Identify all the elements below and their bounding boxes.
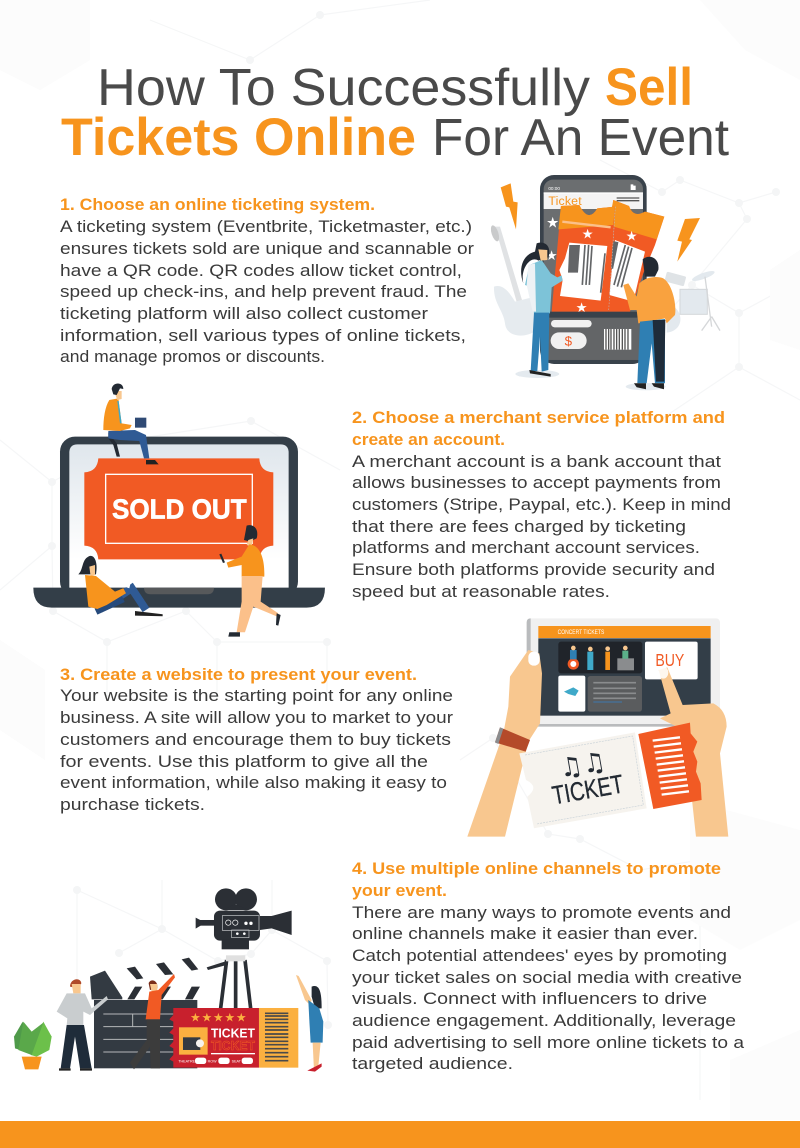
text block: step 3 body: purchase tickets. xyxy=(60,795,205,814)
icon: phone xyxy=(540,175,647,364)
icon: left ticket xyxy=(546,205,615,316)
title: Sell xyxy=(605,58,693,117)
icon: hands xyxy=(467,650,728,837)
icon: phone: 00:00 xyxy=(548,186,560,191)
icon: phone: $ xyxy=(565,333,573,348)
text block: step 3 body xyxy=(60,686,453,814)
illustration: tablet and ticket xyxy=(467,618,728,837)
heading: step 2: create an account. xyxy=(352,430,505,449)
person: woman in blue dress xyxy=(296,975,323,1072)
text block: step 3 body: customers and encourage them to buy tickets xyxy=(60,730,451,749)
ticket: star ticket: SEAT xyxy=(232,1059,242,1063)
text block: step 2 body: that there are fees charged by ticketing xyxy=(352,517,686,536)
icon: lightning bolts xyxy=(501,183,700,262)
icon: tablet: BUY xyxy=(655,650,684,670)
text block: step 4 body: your ticket sales on social media with creative xyxy=(352,968,742,987)
ticket: sold out xyxy=(84,458,273,559)
text block: step 3 body: event information, while also making it easy to xyxy=(60,773,447,792)
text block: step 4 body: audience engagement. Additionally, leverage xyxy=(352,1011,736,1030)
text block: step 1 body: have a QR code. QR codes allow ticket control, xyxy=(60,261,462,280)
icon: clapperboard xyxy=(90,958,200,1068)
ticket: star ticket: TICKET xyxy=(211,1038,255,1053)
panel: step 4 text xyxy=(352,859,745,1073)
text block: step 1 body xyxy=(60,217,474,366)
text block: step 4 body: visuals. Connect with influencers to drive xyxy=(352,989,707,1008)
icon: woman xyxy=(515,243,563,378)
ticket: ♫♫ xyxy=(557,747,608,784)
icon: left ticket: ★ xyxy=(576,301,588,316)
ticket xyxy=(519,723,702,828)
text block: step 4 body xyxy=(352,903,745,1073)
ticket: star ticket: ★★★★★ xyxy=(190,1010,247,1024)
icon: right ticket: ★ xyxy=(626,230,638,245)
text block: step 2 body: customers (Stripe, Paypal, etc.). Keep in mind xyxy=(352,495,731,514)
icon: tablet: CONCERT TICKETS xyxy=(558,630,604,636)
ticket: sold out: SOLD OUT xyxy=(112,494,247,525)
illustration: film production and ticket xyxy=(14,888,323,1072)
icon: man xyxy=(623,257,675,390)
icon: right ticket xyxy=(608,200,664,312)
text block: step 1 body: and manage promos or discounts. xyxy=(60,347,325,366)
icon: potted plant xyxy=(14,1022,52,1069)
heading: step 3: 3. Create a website to present your event. xyxy=(60,665,417,684)
heading: step 1: 1. Choose an online ticketing system. xyxy=(60,195,375,214)
text block: step 1 body: ensures tickets sold are unique and scannable or xyxy=(60,239,474,258)
text block: step 4 body: Catch potential attendees' eyes by promoting xyxy=(352,946,727,965)
person: man pointing xyxy=(57,979,108,1071)
person: man in orange xyxy=(130,974,175,1069)
ticket: star ticket: TICKET xyxy=(211,1026,255,1041)
icon: laptop xyxy=(33,437,325,608)
icon: tablet xyxy=(527,618,720,727)
person: sitting on floor xyxy=(78,556,163,616)
heading: step 4 xyxy=(352,859,721,900)
text block: step 4 body: There are many ways to promote events and xyxy=(352,903,731,922)
text block: step 2 body: speed but at reasonable rates. xyxy=(352,582,610,601)
icon: movie camera on tripod xyxy=(196,888,292,1008)
panel: step 1 text xyxy=(60,195,474,366)
title xyxy=(61,58,730,167)
text block: step 4 body: targeted audience. xyxy=(352,1054,513,1073)
text block: step 2 body xyxy=(352,452,731,601)
heading: step 4: 4. Use multiple online channels to promote xyxy=(352,859,721,878)
illustration: laptop with sold out ticket xyxy=(33,383,325,637)
text block: step 2 body: A merchant account is a bank account that xyxy=(352,452,721,471)
title: For An Event xyxy=(432,109,730,167)
heading: step 2: 2. Choose a merchant service platform and xyxy=(352,408,725,427)
panel: step 2 text xyxy=(352,408,731,601)
ticket: star ticket: THEATRE xyxy=(178,1059,196,1063)
ticket: TICKET xyxy=(550,768,626,810)
panel: step 3 text xyxy=(60,665,453,814)
icon: wristband xyxy=(495,727,530,752)
footer bar xyxy=(0,1121,800,1148)
icon: guitar xyxy=(489,224,537,336)
text block: step 2 body: Ensure both platforms provide security and xyxy=(352,560,715,579)
text block: step 1 body: speed up check-ins, and help prevent fraud. The xyxy=(60,282,467,301)
title: How To Successfully xyxy=(97,59,590,117)
icon: left ticket: ★ xyxy=(582,227,594,242)
person: sitting on laptop xyxy=(103,383,159,464)
image: band on stage xyxy=(558,642,642,673)
icon: phone: Ticket xyxy=(548,194,582,208)
text block: step 1 body: ticketing platform will also collect customer xyxy=(60,304,428,323)
ticket: star ticket: ROW xyxy=(208,1059,217,1063)
icon: left ticket: ★ xyxy=(546,249,558,264)
icon: drum kit xyxy=(664,269,720,333)
heading: step 4: your event. xyxy=(352,881,447,900)
illustration: phone with tickets xyxy=(489,175,720,390)
text block: step 1 body: A ticketing system (Eventbrite, Ticketmaster, etc.) xyxy=(60,217,472,236)
text block: step 1 body: information, sell various types of online tickets, xyxy=(60,326,466,345)
person: standing with phone xyxy=(219,525,281,637)
text block: step 2 body: allows businesses to accept payments from xyxy=(352,473,721,492)
text block: step 3 body: business. A site will allow you to market to your xyxy=(60,708,453,727)
title: Tickets Online xyxy=(61,108,416,167)
text block: step 4 body: paid advertising to sell more online tickets to a xyxy=(352,1033,745,1052)
text block: step 3 body: for events. Use this platform to give all the xyxy=(60,752,428,771)
text block: step 2 body: platforms and merchant account services. xyxy=(352,538,700,557)
icon: left ticket: ★ xyxy=(546,214,559,231)
ticket: star ticket xyxy=(169,1008,298,1068)
heading: step 2 xyxy=(352,408,725,449)
text block: step 3 body: Your website is the starting point for any online xyxy=(60,686,453,705)
text block: step 4 body: online channels make it easier than ever. xyxy=(352,924,698,943)
